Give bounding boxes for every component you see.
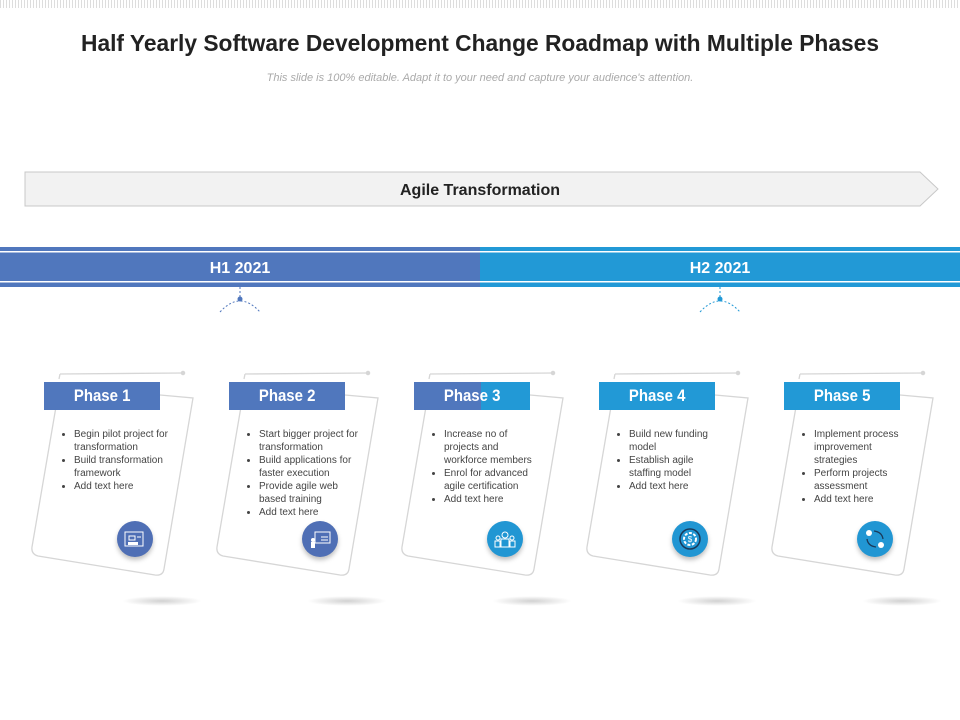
bullets: Implement process improvement strategies: [814, 429, 898, 466]
icon: process cycle: [857, 521, 893, 557]
bullets: Add text here: [629, 481, 688, 492]
subtitle: This slide is 100% editable. Adapt it to your need and capture your audience's attention.: [267, 72, 693, 84]
shadow: [307, 596, 387, 606]
bullets: Perform projects assessment: [814, 468, 887, 492]
bullets: Increase no of projects and workforce members: [444, 429, 532, 466]
label: [44, 382, 160, 410]
label: [784, 382, 900, 410]
bullets: Build applications for faster execution: [259, 455, 351, 479]
bullets: Build new funding model: [629, 429, 708, 453]
icon: funding gear: [672, 521, 708, 557]
card: phase 3: [414, 382, 564, 605]
icon: team: [487, 521, 523, 557]
timeline band: H2 2021: [690, 260, 750, 277]
bullets: Establish agile staffing model: [629, 455, 693, 479]
bullets: Enrol for advanced agile certification: [444, 468, 528, 492]
card: phase 2: [229, 382, 379, 605]
arrow: agile transformation: Agile Transformation: [400, 182, 560, 199]
timeline band: H1 2021: [210, 260, 270, 277]
arrow: agile transformation: [24, 172, 938, 206]
connector H1: [220, 287, 260, 312]
title: Half Yearly Software Development Change Roadmap with Multiple Phases: [81, 30, 879, 56]
bullets: Add text here: [259, 507, 318, 518]
label: Phase 4: [629, 386, 685, 405]
card: phase 1: [44, 382, 194, 605]
bullets: [432, 429, 532, 505]
label: Phase 3: [444, 386, 500, 405]
shadow: [862, 596, 942, 606]
bullets: Begin pilot project for transformation: [74, 429, 168, 453]
bullets: [802, 429, 898, 505]
connector H2: [700, 287, 740, 312]
label: Phase 1: [74, 386, 130, 405]
bullets: [617, 429, 708, 492]
bullets: Add text here: [74, 481, 133, 492]
icon: blueprint: [117, 521, 153, 557]
card: phase 5: [784, 382, 934, 605]
bullets: Build transformation framework: [74, 455, 163, 479]
icon: funding gear: $: [688, 535, 693, 544]
card outlines: [31, 370, 934, 576]
bullets: Add text here: [814, 494, 873, 505]
shadow: [677, 596, 757, 606]
bullets: Start bigger project for transformation: [259, 429, 358, 453]
shadow: [122, 596, 202, 606]
bullets: Add text here: [444, 494, 503, 505]
bullets: [247, 429, 358, 518]
label: Phase 2: [259, 386, 315, 405]
top stripe pattern: [0, 0, 960, 8]
card: phase 4: [599, 382, 749, 605]
label: Phase 5: [814, 386, 870, 405]
label: [599, 382, 715, 410]
label: [414, 382, 530, 410]
icon: presentation: [302, 521, 338, 557]
bullets: [62, 429, 168, 492]
label: [229, 382, 345, 410]
shadow: [492, 596, 572, 606]
bullets: Provide agile web based training: [259, 481, 338, 505]
timeline band: [0, 247, 960, 287]
